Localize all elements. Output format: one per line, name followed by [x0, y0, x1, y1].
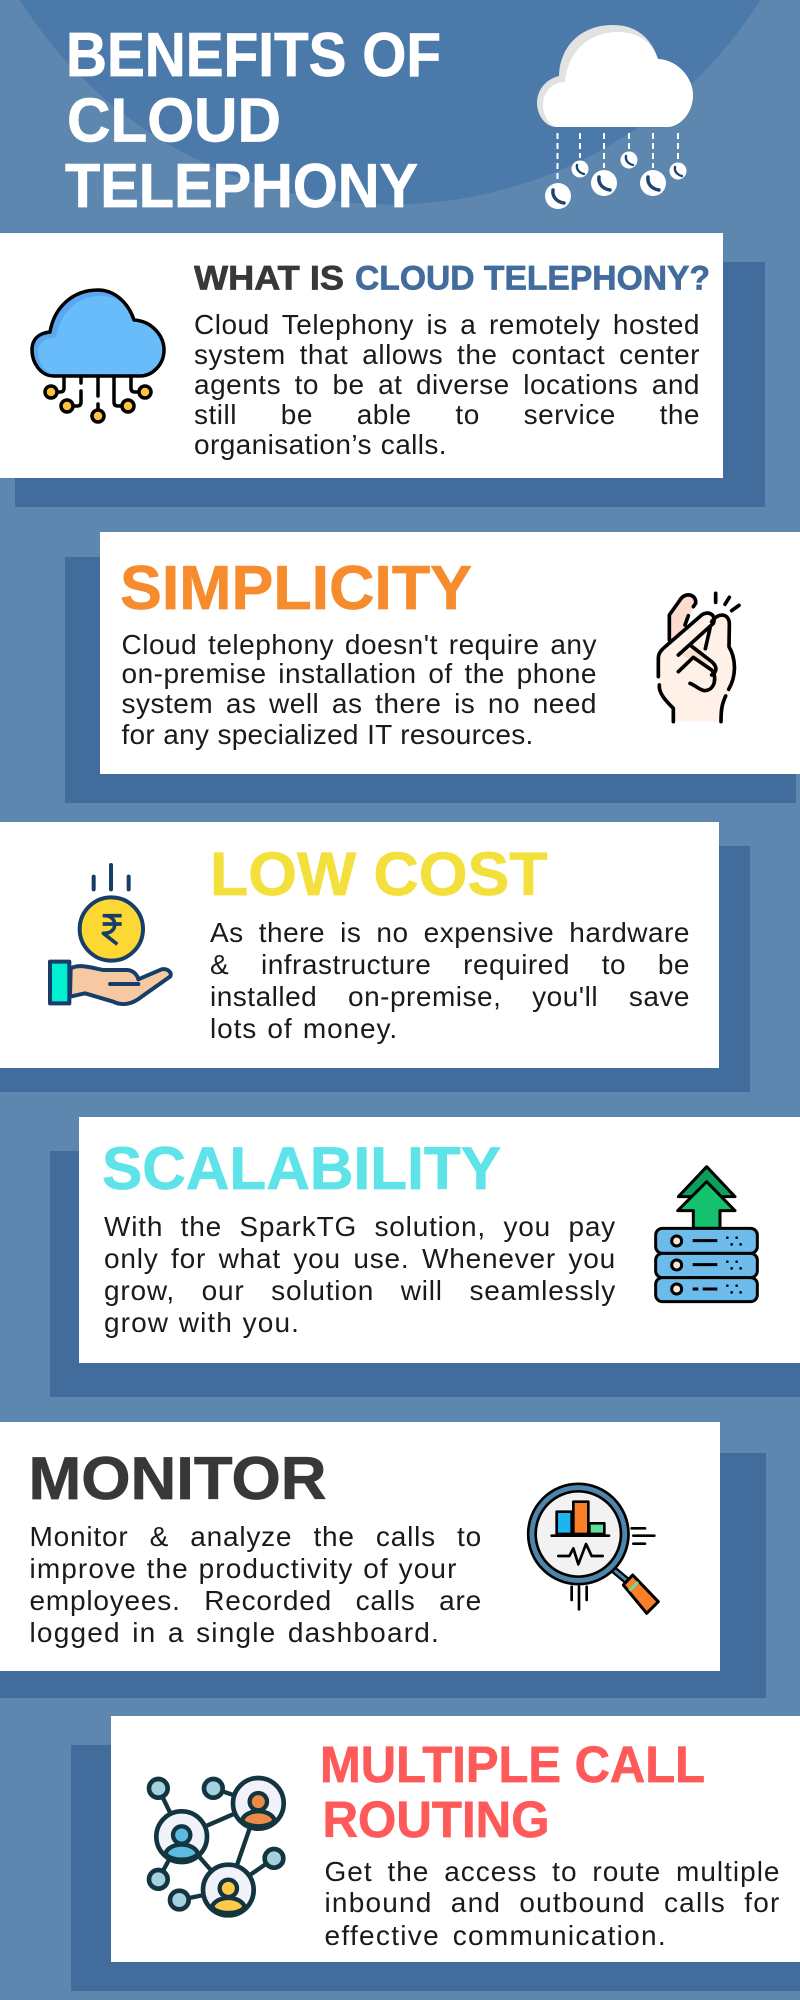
- icon: cloud with hanging phones: [537, 25, 693, 209]
- icon: connected people network: [146, 1776, 286, 1918]
- text: scalability description: [104, 1211, 616, 1338]
- text: scalability description: With the SparkTG solution, you pay: [104, 1211, 616, 1242]
- title: CLOUD: [67, 87, 281, 156]
- text: simplicity description: system as well as there is no need: [122, 688, 597, 719]
- panel: multiple call routing: [71, 1716, 800, 1991]
- text: simplicity description: [122, 628, 597, 750]
- text: cloud telephony definition: Cloud Telephony is a remotely hosted: [194, 309, 700, 340]
- heading: what is cloud telephony: WHAT IS: [194, 260, 344, 298]
- heading: what is cloud telephony: [194, 260, 710, 298]
- text: scalability description: grow, our solution will seamlessly: [104, 1275, 616, 1306]
- icon: blue circuit cloud: [30, 288, 166, 424]
- text: cloud telephony definition: organisation’s calls.: [194, 429, 447, 460]
- text: scalability description: grow with you.: [104, 1307, 300, 1338]
- text: simplicity description: Cloud telephony doesn't require any: [122, 628, 597, 660]
- text: cloud telephony definition: agents to be at diverse locations and: [194, 369, 700, 400]
- text: monitor description: logged in a single dashboard.: [30, 1616, 440, 1648]
- icon: finger snap hand: [656, 592, 741, 724]
- text: multiple call routing description: [324, 1856, 780, 1951]
- panel: low cost: [0, 822, 750, 1092]
- text: monitor description: [30, 1520, 482, 1648]
- text: multiple call routing description: effective communication.: [324, 1920, 667, 1951]
- text: low cost description: [210, 917, 690, 1044]
- icon: hand holding rupee coin: [48, 863, 173, 1006]
- text: low cost description: installed on-premise, you'll save: [210, 981, 690, 1012]
- text: monitor description: employees. Recorded calls are: [30, 1584, 482, 1616]
- panel: what is cloud telephony: [0, 233, 765, 507]
- text: simplicity description: on-premise installation of the phone: [122, 658, 597, 689]
- heading: multiple call routing: [320, 1740, 705, 1842]
- text: cloud telephony definition: [194, 309, 700, 460]
- text: cloud telephony definition: system that allows the contact center: [194, 339, 700, 370]
- header background circle: [20, 0, 760, 204]
- text: multiple call routing description: inbound and outbound calls for: [324, 1887, 780, 1918]
- panel: scalability: [50, 1117, 800, 1397]
- icon: magnifier over chart: [526, 1482, 660, 1615]
- text: low cost description: & infrastructure required to be: [210, 949, 690, 980]
- text: multiple call routing description: Get the access to route multiple: [324, 1856, 780, 1887]
- panel: monitor: [0, 1422, 766, 1698]
- text: low cost description: lots of money.: [210, 1013, 398, 1044]
- heading: what is cloud telephony: CLOUD TELEPHONY?: [355, 260, 710, 298]
- title: [65, 24, 441, 214]
- text: monitor description: Monitor & analyze the calls to: [30, 1520, 482, 1552]
- icon: server stack with up arrow: [654, 1165, 759, 1304]
- text: low cost description: As there is no expensive hardware: [210, 917, 690, 948]
- text: monitor description: improve the productivity of your: [30, 1552, 458, 1584]
- text: simplicity description: for any specialized IT resources.: [122, 718, 534, 750]
- panel: simplicity: [65, 532, 800, 803]
- text: cloud telephony definition: still be able to service the: [194, 399, 700, 430]
- text: scalability description: only for what you use. Whenever you: [104, 1243, 616, 1274]
